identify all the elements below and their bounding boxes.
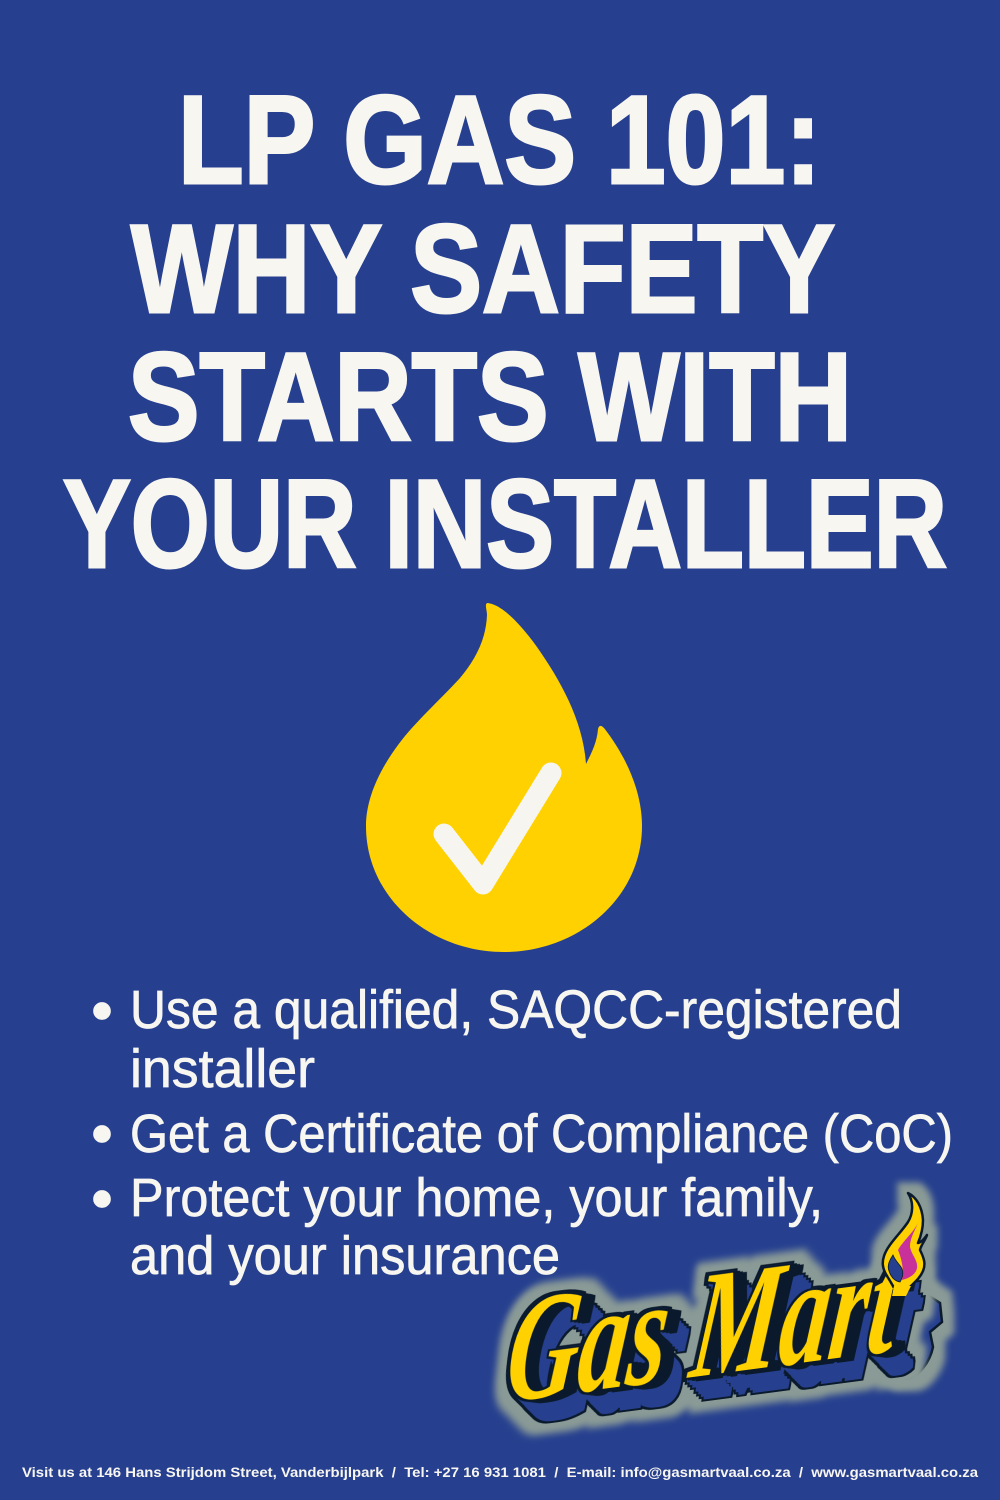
- bullet list: [94, 980, 953, 1286]
- logo rear blocks and flame halo: [880, 1193, 942, 1379]
- footer contact line: Visit us at 146 Hans Strijdom Street, Vanderbijlpark / Tel: +27 16 931 1081 / E-mail: info@gasmartvaal.co.za / www.gasmartvaal.co.za: [22, 1465, 979, 1480]
- bullet 1: Use a qualified, SAQCC-registered: [130, 980, 902, 1040]
- title: LP GAS 101:: [178, 71, 821, 210]
- bullet 3: and your insurance: [130, 1226, 560, 1286]
- bullet 3: Protect your home, your family,: [130, 1168, 823, 1228]
- title: [63, 71, 947, 594]
- bullet 1: installer: [130, 1039, 315, 1099]
- icon: check mark: [444, 773, 551, 884]
- bullet 1: [94, 980, 902, 1099]
- icon: flame with check mark: [366, 603, 642, 952]
- bullet 3: [94, 1168, 823, 1286]
- title: WHY SAFETY: [131, 200, 835, 339]
- title: STARTS WITH: [128, 328, 852, 467]
- logo torch flame: [883, 1193, 927, 1296]
- logo: Gas Mart: [499, 1193, 942, 1435]
